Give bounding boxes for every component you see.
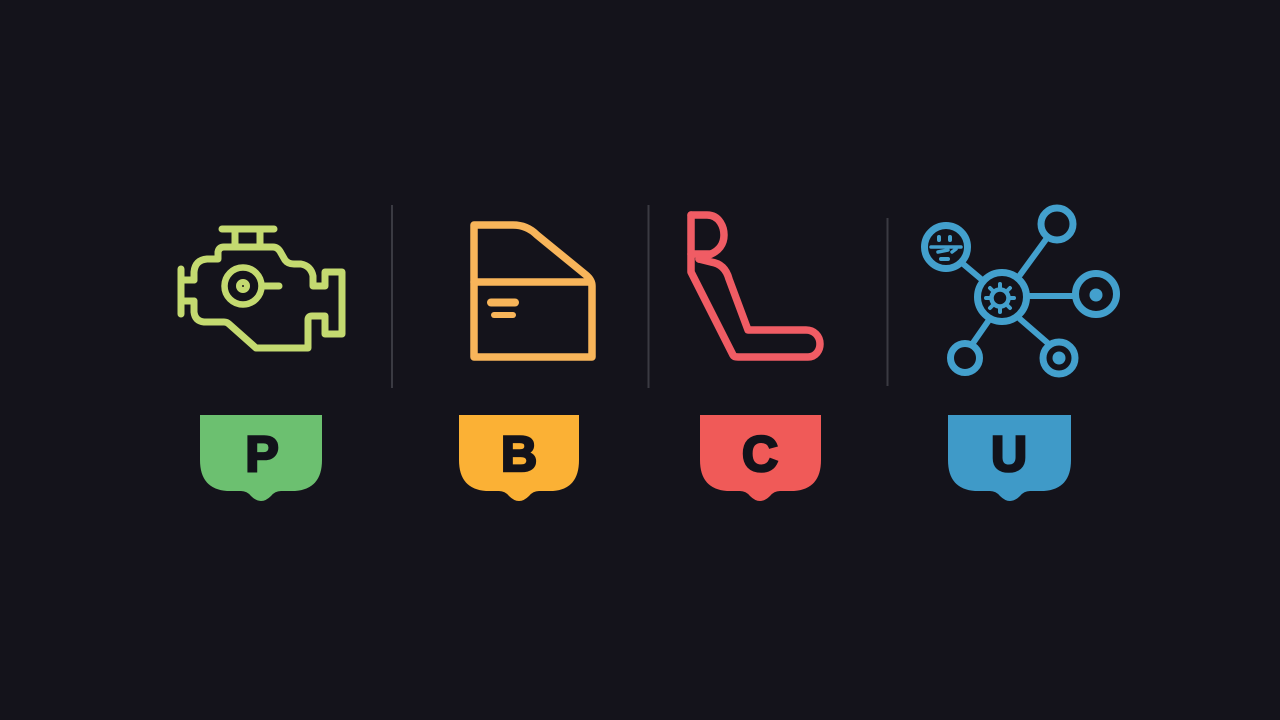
badge: U: [948, 415, 1071, 501]
badge: B: [459, 415, 579, 501]
icon: network of connected modules: [924, 208, 1116, 374]
badge: B: B: [501, 426, 537, 482]
icon: car seat: [691, 215, 820, 357]
icon: engine: [181, 229, 342, 348]
icon: car door: [474, 225, 592, 357]
badge: P: [200, 415, 322, 501]
badge: U: U: [991, 426, 1027, 482]
badge: P: P: [245, 426, 279, 482]
badge: C: [700, 415, 821, 501]
badge: C: C: [742, 426, 778, 482]
